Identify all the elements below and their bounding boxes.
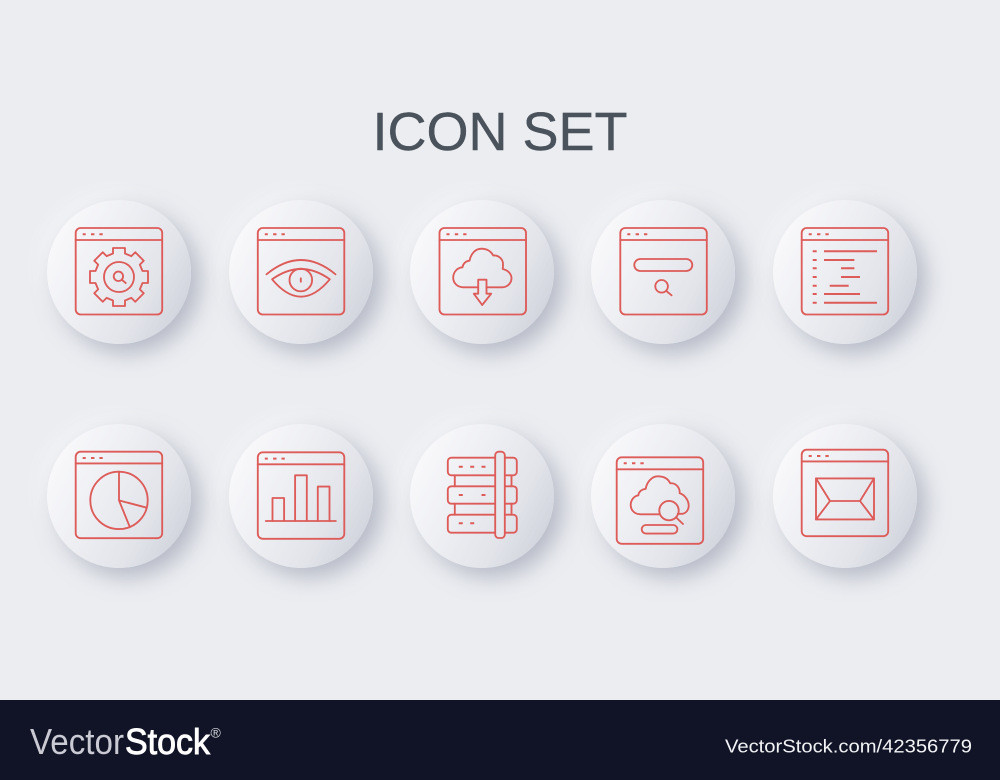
logo: VectorStock wordmark: ® bbox=[210, 724, 222, 740]
icon: browser window with eye bbox=[228, 200, 372, 344]
icon: browser window with gear and magnifier bbox=[47, 200, 191, 344]
icon: browser window with pie chart bbox=[47, 424, 191, 568]
image id url: VectorStock.com/42356779 bbox=[725, 736, 972, 756]
icon: browser window with cloud download bbox=[410, 200, 554, 344]
footer bar bbox=[0, 700, 1000, 780]
icon: browser window with bar chart bbox=[228, 424, 372, 568]
icon: browser window with cloud search bbox=[591, 424, 735, 568]
title: ICON SET bbox=[372, 102, 628, 162]
icon: browser window with code lines bbox=[773, 200, 917, 344]
logo: VectorStock wordmark: Vector bbox=[30, 721, 124, 762]
icon: browser window with search bar bbox=[591, 200, 735, 344]
logo: VectorStock wordmark bbox=[30, 721, 222, 762]
icon: server rack bbox=[410, 424, 554, 568]
icon: browser window with envelope bbox=[773, 424, 917, 568]
logo: VectorStock wordmark: Stock bbox=[125, 721, 211, 762]
